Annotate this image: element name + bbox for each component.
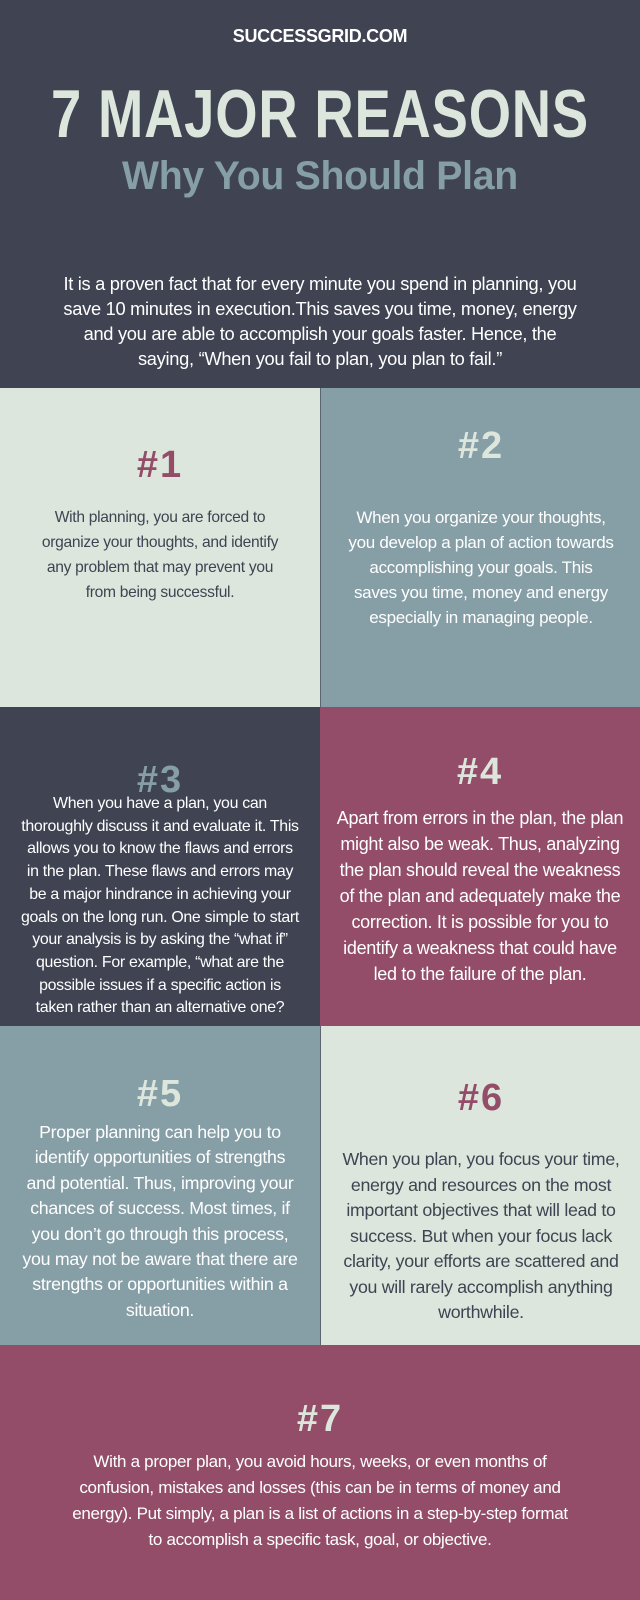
text 4	[336, 808, 623, 984]
text 1: from being successful.	[86, 584, 234, 601]
text 5: strengths or opportunities within a	[32, 1274, 288, 1294]
number 1: #1	[137, 444, 183, 486]
text 3: When you have a plan, you can	[53, 795, 267, 812]
text 3: taken rather than an alternative one?	[36, 999, 284, 1016]
subtitle: Why You Should Plan	[122, 154, 518, 198]
text 1: organize your thoughts, and identify	[42, 534, 278, 551]
text 3: possible issues if a specific action is	[39, 977, 281, 994]
number 5: #5	[137, 1073, 183, 1115]
site name: SUCCESSGRID.COM	[233, 26, 407, 46]
text 3: question. For example, “what are the	[36, 954, 284, 971]
text 6: important objectives that will lead to	[346, 1200, 616, 1220]
text 6: energy and resources on the most	[351, 1174, 611, 1194]
text 5: Proper planning can help you to	[39, 1122, 281, 1142]
panel: #3	[0, 707, 320, 1026]
text 1: any problem that may prevent you	[47, 559, 273, 576]
panel: #7	[0, 1345, 640, 1600]
text 2	[348, 508, 614, 627]
text 7: With a proper plan, you avoid hours, weeks, or even months of	[93, 1452, 547, 1471]
text 5: you may not be aware that there are	[22, 1249, 298, 1269]
text 3: allows you to know the flaws and errors	[27, 840, 293, 857]
text 2: saves you time, money and energy	[354, 583, 608, 602]
text 4: of the plan and adequately make the	[340, 886, 620, 906]
text 7: energy). Put simply, a plan is a list of actions in a step-by-step format	[72, 1504, 568, 1523]
text 2: When you organize your thoughts,	[356, 508, 606, 527]
text 2: accomplishing your goals. This	[369, 558, 593, 577]
text 3: your analysis is by asking the “what if”	[32, 931, 288, 948]
text 5	[22, 1122, 298, 1320]
text 3: be a major hindrance in achieving your	[29, 886, 291, 903]
text 1	[42, 509, 278, 601]
text 1: With planning, you are forced to	[55, 509, 265, 526]
text 6: you will rarely accomplish anything	[349, 1276, 613, 1296]
text 5: situation.	[126, 1300, 194, 1320]
text 2: you develop a plan of action towards	[348, 533, 614, 552]
number 6: #6	[458, 1077, 504, 1119]
text 5: identify opportunities of strengths	[35, 1147, 285, 1167]
text 3: thoroughly discuss it and evaluate it. This	[21, 818, 299, 835]
intro text	[63, 273, 577, 369]
text 7	[72, 1452, 568, 1549]
text 5: you don’t go through this process,	[32, 1224, 288, 1244]
intro text: saying, “When you fail to plan, you plan to fail.”	[138, 348, 502, 369]
panel: #6	[320, 1026, 640, 1345]
number 7: #7	[297, 1398, 343, 1440]
panel: #4	[320, 707, 640, 1026]
text 3: goals on the long run. One simple to start	[21, 909, 299, 926]
text 6: worthwhile.	[438, 1302, 524, 1322]
panel: #2	[320, 388, 640, 707]
text 7: to accomplish a specific task, goal, or objective.	[148, 1530, 492, 1549]
title: 7 MAJOR REASONS	[51, 76, 589, 152]
text 5: chances of success. Most times, if	[30, 1198, 290, 1218]
text 6: clarity, your efforts are scattered and	[343, 1251, 619, 1271]
intro text: It is a proven fact that for every minute you spend in planning, you	[63, 273, 577, 294]
text 4: identify a weakness that could have	[343, 938, 617, 958]
number 3: #3	[137, 759, 183, 801]
text 4: might also be weak. Thus, analyzing	[340, 834, 620, 854]
number 4: #4	[457, 751, 503, 793]
text 7: confusion, mistakes and losses (this can be in terms of money and	[79, 1478, 561, 1497]
panel: #5	[0, 1026, 320, 1345]
intro text: save 10 minutes in execution.This saves you time, money, energy	[63, 298, 577, 319]
number 2: #2	[458, 425, 504, 467]
text 4: Apart from errors in the plan, the plan	[337, 808, 623, 828]
text 4: led to the failure of the plan.	[374, 964, 586, 984]
text 4: the plan should reveal the weakness	[340, 860, 620, 880]
text 5: and potential. Thus, improving your	[27, 1173, 293, 1193]
text 4: correction. It is possible for you to	[351, 912, 609, 932]
panel: #1	[0, 388, 320, 707]
text 6	[342, 1149, 620, 1322]
text 6: success. But when your focus lack	[350, 1226, 612, 1246]
text 2: especially in managing people.	[369, 608, 593, 627]
text 3: in the plan. These flaws and errors may	[27, 863, 293, 880]
text 6: When you plan, you focus your time,	[342, 1149, 620, 1169]
intro text: and you are able to accomplish your goals faster. Hence, the	[84, 323, 556, 344]
text 3	[21, 795, 300, 1016]
header panel	[0, 0, 640, 388]
